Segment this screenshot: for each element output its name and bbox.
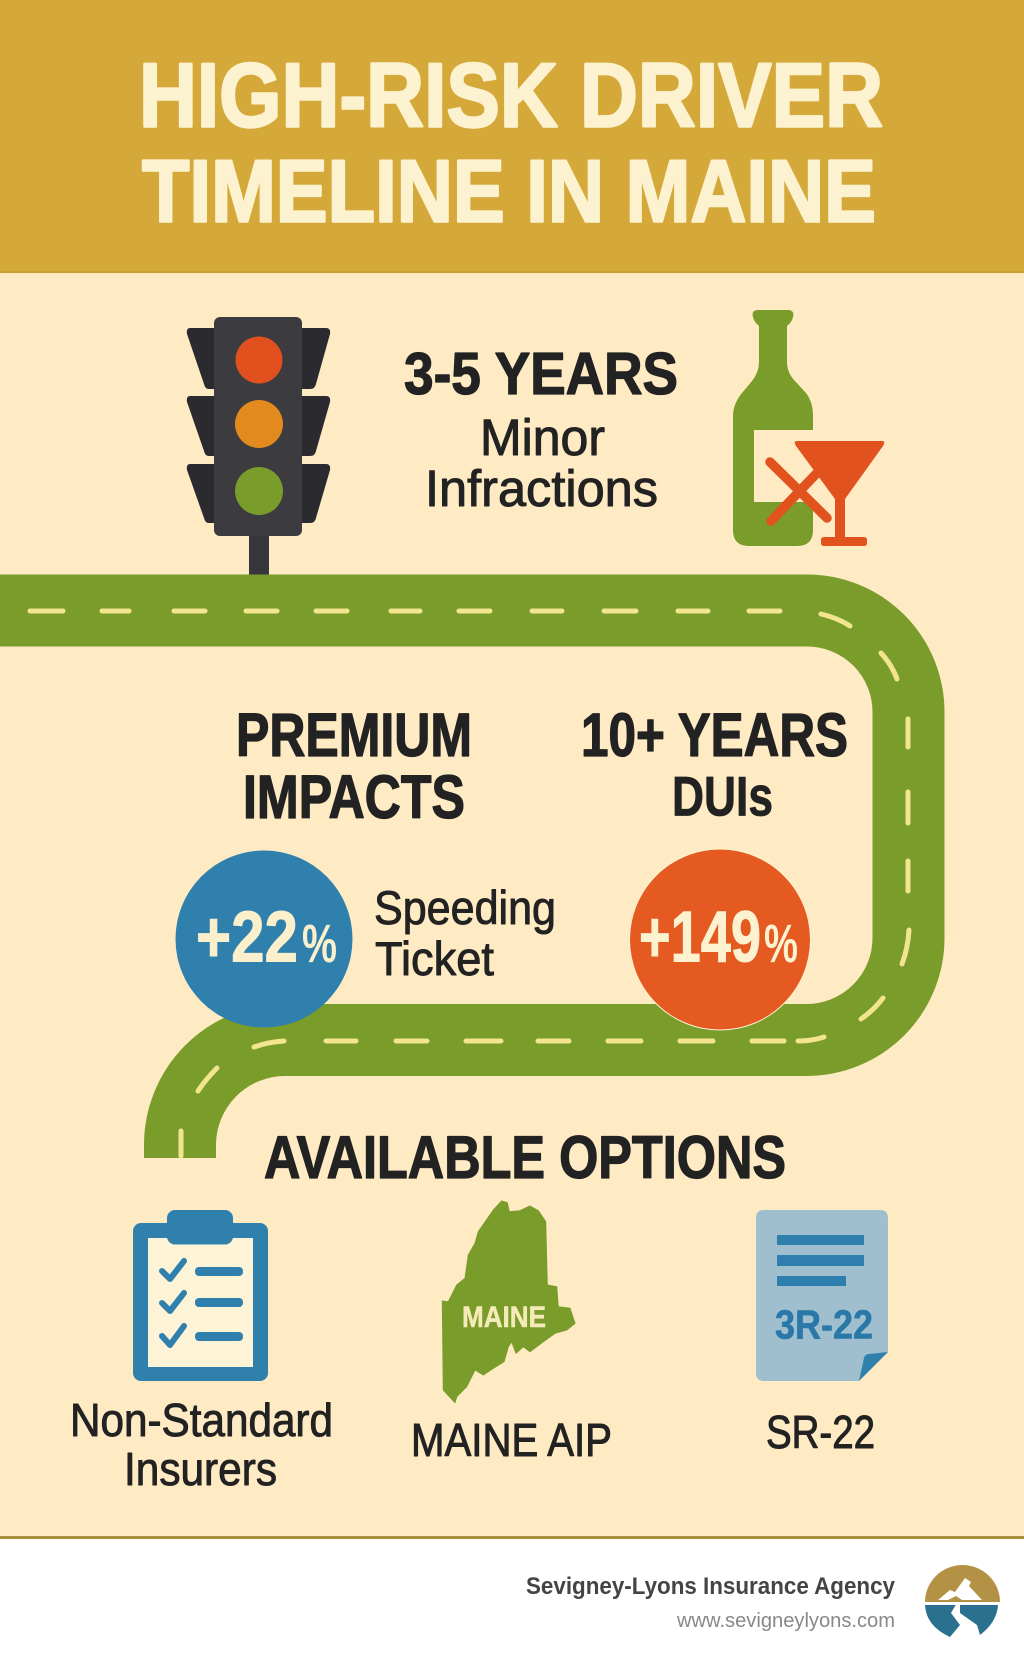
road dashes <box>30 611 909 1156</box>
logo <box>925 1565 1000 1637</box>
text: minor infractions: Infractions <box>425 460 658 517</box>
footer <box>0 1536 1024 1666</box>
text: speeding ticket: Ticket <box>375 932 494 985</box>
icon: bottle and glass <box>733 310 884 546</box>
heading: available options: AVAILABLE OPTIONS <box>264 1124 786 1191</box>
badge: +22% <box>176 850 352 1028</box>
heading: premium impacts <box>236 701 472 831</box>
text: speeding ticket: Speeding <box>374 881 556 934</box>
heading: 3-5 years: 3-5 YEARS <box>404 340 678 407</box>
label: non-standard insurers: Insurers <box>124 1443 277 1495</box>
icon: SR-22 document <box>756 1210 888 1381</box>
road <box>0 610 909 1158</box>
icon: SR-22 document: 3R-22 <box>775 1302 873 1348</box>
badge: +149% <box>629 848 811 1030</box>
text: minor infractions: Minor <box>480 409 605 466</box>
label: non-standard insurers: Non-Standard <box>70 1394 333 1446</box>
badge: +22%: +22 <box>196 898 298 978</box>
label: Maine AIP: MAINE AIP <box>411 1414 612 1466</box>
title: TIMELINE IN MAINE <box>142 142 876 240</box>
text: minor infractions <box>425 409 658 517</box>
heading: 10+ years: 10+ YEARS <box>581 701 848 769</box>
heading: premium impacts: IMPACTS <box>243 763 465 831</box>
label: SR-22: SR-22 <box>766 1406 875 1458</box>
badge: +149%: +149 <box>639 898 761 978</box>
icon: clipboard <box>133 1210 268 1381</box>
agency name: Sevigney-Lyons Insurance Agency <box>526 1573 896 1600</box>
text: DUIs: DUIs <box>672 764 773 828</box>
header banner <box>0 0 1024 273</box>
icon: traffic light <box>187 317 330 578</box>
badge: +149%: % <box>764 914 798 974</box>
title <box>139 46 883 240</box>
badge: +22%: % <box>302 914 337 974</box>
label: non-standard insurers <box>70 1394 333 1495</box>
icon: Maine map <box>442 1201 575 1403</box>
heading: premium impacts: PREMIUM <box>236 701 472 769</box>
website: www.sevigneylyons.com <box>676 1610 895 1632</box>
text: speeding ticket <box>374 881 556 985</box>
title: HIGH-RISK DRIVER <box>139 46 883 146</box>
icon: Maine map: MAINE <box>462 1301 546 1334</box>
